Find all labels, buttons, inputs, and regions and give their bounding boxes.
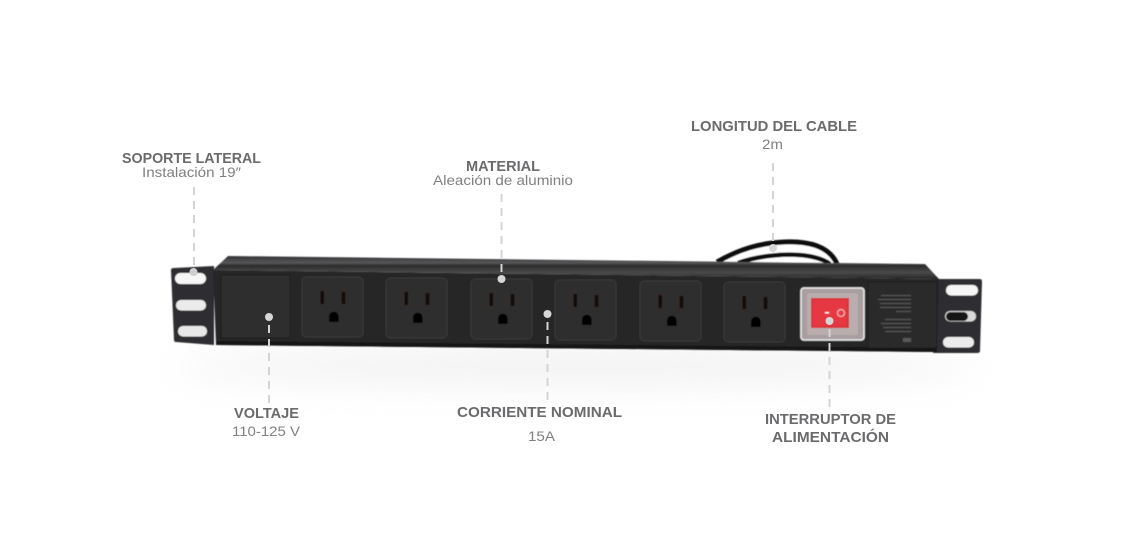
blank plate [221,275,290,338]
callout: interruptor de alimentación: ALIMENTACIÓN [772,428,889,446]
right mounting bracket [933,279,982,353]
bottom lip [216,341,937,352]
callout: material [433,158,573,283]
callout: soporte lateral: Instalación 19″ [142,164,241,180]
outlet 1 [302,277,363,337]
callout: voltaje: 110-125 V [232,423,301,439]
callout: voltaje [232,313,301,439]
floor shadow [175,350,975,382]
callout: interruptor de alimentación [765,317,896,446]
front panel [213,270,939,352]
outlet 5 [640,281,701,341]
callout: material: MATERIAL [466,158,540,175]
callout: soporte lateral: SOPORTE LATERAL [122,150,261,167]
power switch [801,288,864,340]
outlet 4 [555,280,616,340]
outlet 2 [386,278,447,338]
callout: longitud del cable: 2m [762,136,783,152]
callout: soporte lateral [122,150,261,276]
outlet 6 [724,282,785,342]
callout: longitud del cable: LONGITUD DEL CABLE [691,118,857,135]
callout: corriente nominal [457,310,622,444]
left mounting bracket [171,266,214,345]
callout: corriente nominal: CORRIENTE NOMINAL [457,404,622,421]
outlet 3 [471,279,532,339]
power strip [171,242,982,353]
power cable [717,242,837,264]
aluminium top face [213,256,939,279]
callout: material: Aleación de aluminio [433,172,573,188]
callout: voltaje: VOLTAJE [234,405,299,422]
callout: interruptor de alimentación: INTERRUPTOR DE [765,411,896,428]
callout: corriente nominal: 15A [528,428,556,444]
callout: longitud del cable [691,118,857,252]
model label panel [868,282,937,348]
